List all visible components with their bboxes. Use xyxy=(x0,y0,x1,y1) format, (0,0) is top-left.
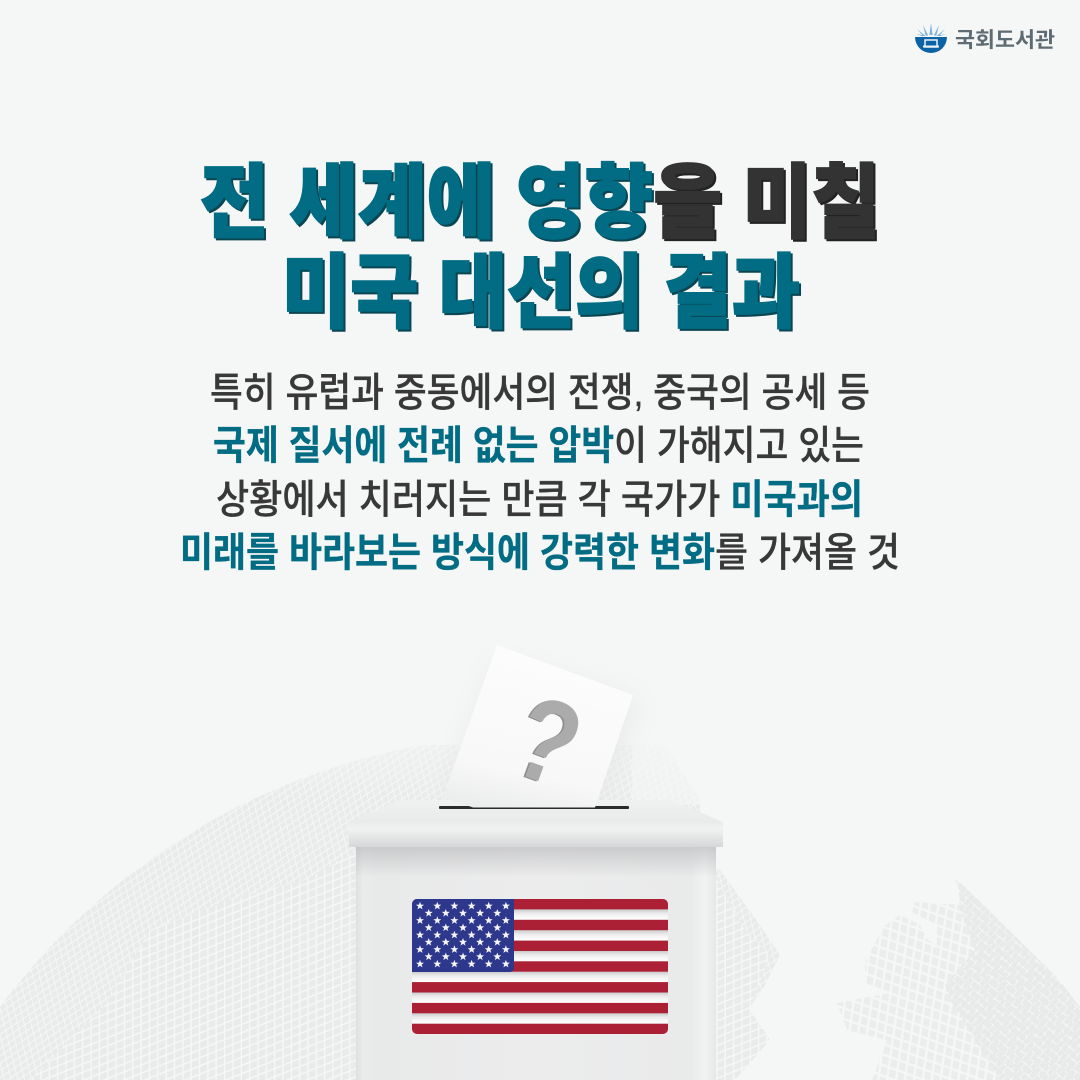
globe backdrop xyxy=(0,735,1080,1080)
flag stripes xyxy=(412,899,668,1034)
ballot shadow xyxy=(445,660,640,800)
body line 3: 상황에서 치러지는 만큼 각 국가가 미국과의 xyxy=(216,478,863,522)
icon: open book with rays xyxy=(915,23,947,53)
body line 1: 특히 유럽과 중동에서의 전쟁, 중국의 공세 등 xyxy=(210,371,870,415)
flag stars xyxy=(416,902,510,967)
landmass: left continent xyxy=(0,735,780,1080)
logo: National Assembly Library xyxy=(915,23,1055,53)
question mark: ? xyxy=(495,669,596,814)
american flag xyxy=(412,899,668,1034)
lid shadow on body xyxy=(356,847,716,877)
title line 2 shadow: 미국 대선의 결과 xyxy=(284,251,802,341)
ballot slot xyxy=(439,806,629,809)
ballot paper with question mark xyxy=(443,645,633,814)
title line 1: 전 세계에 영향을 미칠 xyxy=(200,159,880,249)
title xyxy=(200,159,882,341)
body text xyxy=(180,371,900,575)
flag canton xyxy=(412,899,514,972)
landmass: right continent xyxy=(837,877,1080,1080)
title line 2: 미국 대선의 결과 xyxy=(282,249,800,339)
box lid top xyxy=(349,800,723,822)
body line 2: 국제 질서에 전례 없는 압박이 가해지고 있는 xyxy=(213,424,864,468)
globe limb highlight xyxy=(855,813,955,877)
box lid front xyxy=(349,822,723,847)
ballot box illustration xyxy=(349,700,723,1080)
question mark: ? xyxy=(497,669,598,813)
box body xyxy=(356,847,716,1080)
body line 4: 미래를 바라보는 방식에 강력한 변화를 가져올 것 xyxy=(180,531,900,575)
logo wordmark: 국회도서관 xyxy=(955,29,1055,52)
title line 1 shadow: 전 세계에 영향을 미칠 xyxy=(202,161,882,251)
